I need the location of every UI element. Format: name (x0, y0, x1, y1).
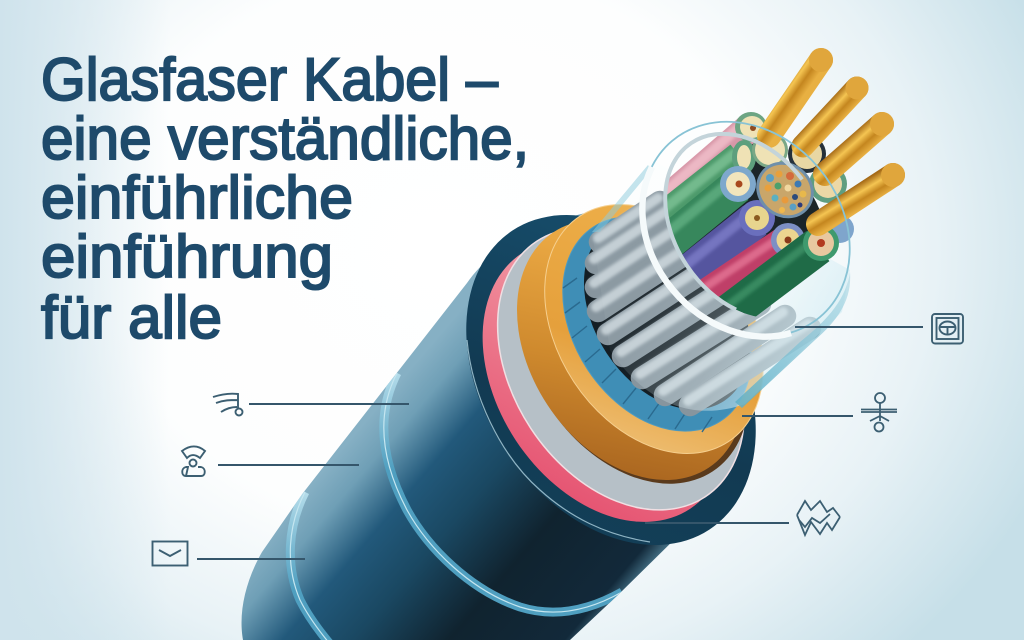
rod 4 (818, 163, 905, 224)
core cavity (682, 143, 820, 314)
grey layer (447, 182, 795, 556)
outer jacket body (242, 213, 670, 640)
blue segmented armour ring (524, 181, 790, 467)
title: Glasfaser Kabel – (41, 46, 499, 113)
icon: socket (932, 314, 963, 344)
thin jacket edge line (467, 340, 650, 542)
icon: junction figure (861, 393, 897, 432)
callout leader lines (197, 327, 923, 559)
title (41, 46, 529, 351)
icon: wifi person (182, 446, 205, 476)
sleeve inner ring (631, 103, 863, 349)
copper layer front ring (500, 163, 808, 495)
tube: crimson (700, 223, 804, 297)
inner dark cavity (550, 188, 784, 440)
tube ends behind gold rods (752, 132, 847, 203)
icon: signal waves (797, 501, 840, 535)
title: einführung (41, 223, 333, 290)
fibre optic cable cross-section (242, 48, 905, 640)
tube: pink (667, 112, 766, 195)
tube: green lower (655, 166, 756, 249)
jacket end face (406, 161, 816, 599)
tube: green upper (667, 140, 756, 218)
title: eine verständliche, (41, 105, 529, 172)
icon: envelope (152, 542, 188, 566)
copper layer body (470, 177, 792, 523)
title: einführliche (41, 164, 353, 231)
tube: purple (682, 200, 775, 280)
grey strand bundle (594, 198, 810, 405)
pink layer (432, 194, 780, 568)
icon: flag with ring (213, 394, 242, 416)
title: für alle (41, 284, 222, 351)
transparent sleeve (592, 160, 850, 411)
rod 2 (803, 76, 868, 146)
sleeve outer ring (599, 80, 893, 378)
central mosaic fibre bundle (745, 150, 825, 230)
rod 3 (825, 112, 894, 174)
shadow gap (471, 177, 797, 527)
gold conductor rods (769, 48, 905, 224)
tube: dark green (722, 215, 854, 316)
rod 1 (769, 48, 833, 136)
coloured fibre tubes (650, 112, 854, 316)
